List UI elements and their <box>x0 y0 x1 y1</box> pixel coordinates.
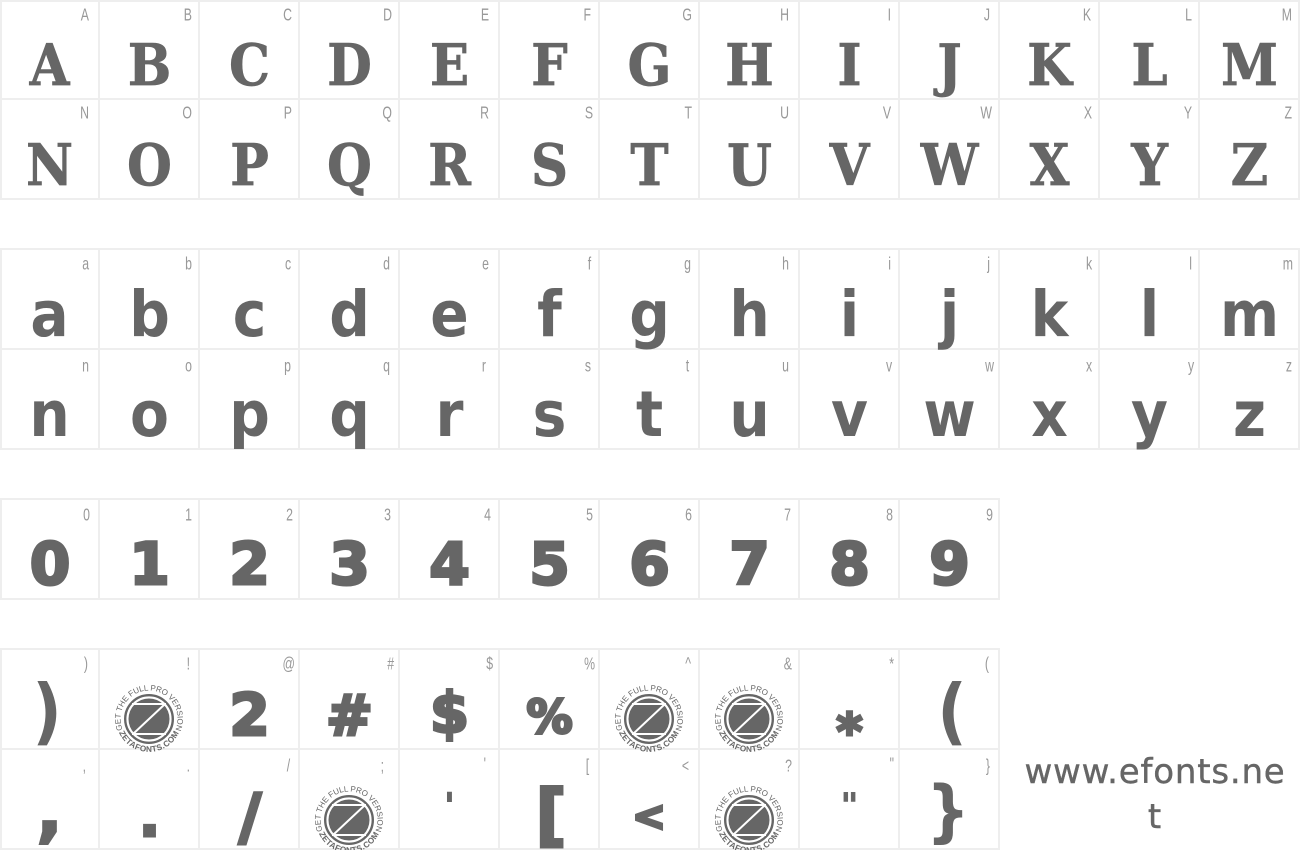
lowercase specimen n-z: x <box>1086 358 1093 376</box>
lowercase specimen a-m: k <box>1031 278 1070 351</box>
lowercase specimen n-z <box>29 358 1292 451</box>
uppercase specimen N-Z: P <box>230 132 269 199</box>
badge: ^ cell: ZETAFONTS.COM <box>619 730 679 752</box>
symbols row 2: . <box>139 785 160 850</box>
symbols row 2: [ <box>586 758 590 776</box>
uppercase specimen A-M: C <box>283 7 292 25</box>
digits specimen 0-9: 5 <box>529 530 570 598</box>
lowercase specimen a-m: e <box>430 278 469 351</box>
symbols row 2: ' <box>484 756 486 774</box>
symbols row 1: ) <box>32 669 62 753</box>
lowercase specimen a-m: f <box>537 278 563 351</box>
symbols row 1: # <box>387 656 395 674</box>
uppercase specimen A-M: G <box>628 32 671 99</box>
digits specimen 0-9: 7 <box>784 507 791 525</box>
uppercase specimen A-M: D <box>383 7 392 25</box>
badge: ? cell: GET THE FULL PRO VERSION <box>714 786 783 832</box>
digits specimen 0-9: 6 <box>629 530 670 598</box>
lowercase specimen a-m: h <box>729 278 770 351</box>
uppercase specimen A-M: H <box>780 7 789 25</box>
lowercase specimen n-z: z <box>1233 378 1266 451</box>
symbols row 2: < <box>682 758 689 776</box>
uppercase specimen A-M: E <box>481 7 489 25</box>
uppercase specimen N-Z: U <box>727 132 772 199</box>
lowercase specimen a-m: g <box>629 278 670 351</box>
lowercase specimen n-z: v <box>831 378 868 451</box>
symbols row 1: $ <box>486 656 494 674</box>
lowercase specimen n-z: t <box>636 378 663 451</box>
uppercase specimen A-M: C <box>229 32 270 99</box>
symbols row 2: . <box>187 758 190 776</box>
symbols row 1: ^ <box>685 656 691 674</box>
uppercase specimen N-Z: Y <box>1130 132 1169 199</box>
badge: & cell: GET THE FULL PRO VERSION <box>714 685 783 731</box>
digits specimen 0-9: 7 <box>729 530 770 598</box>
symbols row 2: < <box>632 794 666 840</box>
lowercase specimen n-z: v <box>886 358 893 376</box>
lowercase specimen n-z: u <box>782 358 789 376</box>
lowercase specimen a-m: b <box>185 256 192 274</box>
lowercase specimen n-z: t <box>686 358 690 376</box>
lowercase specimen n-z: w <box>984 358 994 376</box>
uppercase specimen N-Z: O <box>182 105 192 123</box>
lowercase specimen a-m: i <box>840 278 859 351</box>
digits specimen 0-9: 9 <box>929 530 970 598</box>
lowercase specimen a-m: j <box>986 256 990 274</box>
uppercase specimen N-Z: N <box>26 132 73 199</box>
symbols row 2: , <box>83 758 86 776</box>
uppercase specimen A-M <box>29 7 1292 99</box>
symbols row 1: @ <box>283 656 295 674</box>
uppercase specimen N-Z: P <box>284 105 292 123</box>
badge: ; cell <box>314 786 383 850</box>
grid lines: digits <box>1 499 999 599</box>
lowercase specimen n-z: q <box>383 358 390 376</box>
uppercase specimen N-Z: R <box>428 132 471 199</box>
symbols row 2: } <box>986 758 990 776</box>
symbols row 1: $ <box>430 681 469 746</box>
lowercase specimen a-m: c <box>285 256 292 274</box>
digits specimen 0-9: 2 <box>286 507 293 525</box>
uppercase specimen N-Z: S <box>585 105 593 123</box>
symbols row 1: ! <box>187 656 190 674</box>
uppercase specimen N-Z <box>26 105 1292 199</box>
uppercase specimen N-Z: W <box>920 132 980 199</box>
symbols row 1: % <box>526 690 573 744</box>
digits specimen 0-9 <box>30 507 993 598</box>
lowercase specimen a-m: i <box>888 256 891 274</box>
lowercase specimen a-m: m <box>1220 278 1279 351</box>
badge: ; cell: GET THE FULL PRO VERSION <box>314 786 383 832</box>
uppercase specimen A-M: B <box>128 32 171 99</box>
uppercase specimen A-M: J <box>933 32 962 99</box>
uppercase specimen A-M: L <box>1185 7 1192 25</box>
uppercase specimen N-Z: X <box>1084 105 1092 123</box>
digits specimen 0-9: 3 <box>329 530 370 598</box>
uppercase specimen N-Z: U <box>780 105 789 123</box>
site credit: www.efonts.ne <box>1024 752 1286 792</box>
symbols row 2: , <box>37 773 62 850</box>
symbols row 1: * <box>889 656 894 674</box>
symbols row 2: ? <box>785 758 792 776</box>
uppercase specimen A-M: G <box>682 7 692 25</box>
badge: ^ cell: GET THE FULL PRO VERSION <box>614 685 683 731</box>
lowercase specimen n-z: n <box>29 378 70 451</box>
lowercase specimen a-m: k <box>1086 256 1093 274</box>
lowercase specimen a-m: d <box>329 278 370 351</box>
lowercase specimen n-z: u <box>729 378 770 451</box>
uppercase specimen A-M: H <box>725 32 774 99</box>
lowercase specimen n-z: r <box>482 358 486 376</box>
digits specimen 0-9: 0 <box>83 507 90 525</box>
symbols row 1: & <box>784 656 792 674</box>
uppercase specimen A-M: K <box>1083 7 1091 25</box>
digits specimen 0-9: 1 <box>185 507 192 525</box>
lowercase specimen a-m: c <box>233 278 266 351</box>
lowercase specimen a-m: e <box>482 256 489 274</box>
uppercase specimen N-Z: X <box>1030 132 1070 199</box>
uppercase specimen A-M: M <box>1221 32 1278 99</box>
lowercase specimen a-m: j <box>938 278 959 351</box>
uppercase specimen N-Z: Q <box>382 105 392 123</box>
lowercase specimen n-z: y <box>1188 358 1195 376</box>
lowercase specimen a-m: a <box>82 256 90 274</box>
uppercase specimen N-Z: V <box>829 132 871 199</box>
symbols row 1: ) <box>84 656 88 674</box>
uppercase specimen A-M: M <box>1282 7 1292 25</box>
lowercase specimen a-m: a <box>30 278 69 351</box>
uppercase specimen A-M: F <box>531 32 568 99</box>
symbols row 2: ; <box>381 758 384 776</box>
lowercase specimen n-z: z <box>1286 358 1292 376</box>
lowercase specimen a-m: l <box>1189 256 1192 274</box>
digits specimen 0-9: 8 <box>886 507 893 525</box>
grid lines: lowercase <box>1 249 1299 449</box>
uppercase specimen A-M: L <box>1131 32 1168 99</box>
badge: ^ cell <box>614 685 683 752</box>
symbols row 2: " <box>841 786 858 826</box>
site credit <box>1024 752 1286 837</box>
uppercase specimen N-Z: Y <box>1184 105 1192 123</box>
lowercase specimen n-z: o <box>130 378 169 451</box>
uppercase specimen A-M: K <box>1027 32 1074 99</box>
symbols row 1: % <box>584 656 595 674</box>
badge: ! cell <box>114 685 183 752</box>
badge: ! cell: ZETAFONTS.COM <box>119 730 179 752</box>
lowercase specimen n-z: s <box>585 358 591 376</box>
uppercase specimen N-Z: Q <box>327 132 372 199</box>
lowercase specimen a-m: b <box>129 278 170 351</box>
digits specimen 0-9: 8 <box>829 530 870 598</box>
lowercase specimen n-z: n <box>82 358 89 376</box>
lowercase specimen a-m: d <box>383 256 390 274</box>
uppercase specimen A-M: F <box>583 7 591 25</box>
lowercase specimen a-m: m <box>1283 256 1293 274</box>
uppercase specimen N-Z: S <box>531 132 568 199</box>
uppercase specimen N-Z: O <box>127 132 172 199</box>
uppercase specimen N-Z: T <box>684 105 692 123</box>
symbols row 2: / <box>287 758 291 776</box>
uppercase specimen A-M: J <box>984 7 990 25</box>
symbols row 1: ( <box>937 669 967 753</box>
uppercase specimen N-Z: Z <box>1284 105 1292 123</box>
uppercase specimen A-M: I <box>838 32 862 99</box>
symbols row 1: ( <box>985 656 989 674</box>
badge: & cell: ZETAFONTS.COM <box>719 730 779 752</box>
uppercase specimen N-Z: Z <box>1231 132 1268 199</box>
uppercase specimen A-M: D <box>327 32 372 99</box>
uppercase specimen N-Z: R <box>480 105 489 123</box>
digits specimen 0-9: 3 <box>384 507 391 525</box>
symbols row 1 <box>32 656 989 761</box>
grid lines: uppercase <box>1 1 1299 199</box>
symbols row 2 <box>37 756 990 850</box>
site credit: t <box>1148 797 1162 837</box>
symbols row 2: ' <box>444 786 455 826</box>
lowercase specimen n-z: q <box>329 378 370 451</box>
uppercase specimen N-Z: V <box>883 105 891 123</box>
lowercase specimen a-m: g <box>684 256 691 274</box>
symbols row 1: 2 <box>229 681 270 749</box>
uppercase specimen N-Z: N <box>80 105 89 123</box>
lowercase specimen n-z: r <box>436 378 464 451</box>
uppercase specimen A-M: A <box>81 7 89 25</box>
symbols row 1: * <box>836 703 863 761</box>
badge: ! cell: GET THE FULL PRO VERSION <box>114 685 183 731</box>
digits specimen 0-9: 4 <box>429 530 470 598</box>
grid lines: symbols <box>1 649 999 849</box>
lowercase specimen n-z: o <box>185 358 192 376</box>
symbols row 2: " <box>890 756 894 774</box>
lowercase specimen n-z: x <box>1031 378 1068 451</box>
lowercase specimen n-z: y <box>1131 378 1168 451</box>
badge: ? cell <box>714 786 783 850</box>
symbols row 1: # <box>326 684 373 749</box>
lowercase specimen n-z: s <box>533 378 566 451</box>
symbols row 2: } <box>926 772 970 850</box>
lowercase specimen a-m <box>30 256 1293 351</box>
uppercase specimen N-Z: T <box>630 132 669 199</box>
digits specimen 0-9: 4 <box>484 507 491 525</box>
uppercase specimen A-M: E <box>430 32 469 99</box>
digits specimen 0-9: 6 <box>685 507 692 525</box>
uppercase specimen A-M: A <box>29 32 71 99</box>
lowercase specimen a-m: h <box>782 256 789 274</box>
digits specimen 0-9: 9 <box>986 507 993 525</box>
uppercase specimen A-M: I <box>888 7 891 25</box>
lowercase specimen n-z: p <box>229 378 270 451</box>
lowercase specimen n-z: p <box>284 358 291 376</box>
uppercase specimen A-M: B <box>184 7 192 25</box>
uppercase specimen N-Z: W <box>980 105 992 123</box>
digits specimen 0-9: 5 <box>586 507 593 525</box>
digits specimen 0-9: 1 <box>129 530 170 598</box>
badge: & cell <box>714 685 783 752</box>
lowercase specimen n-z: w <box>923 378 976 451</box>
digits specimen 0-9: 0 <box>30 530 70 598</box>
lowercase specimen a-m: f <box>588 256 592 274</box>
digits specimen 0-9: 2 <box>229 530 270 598</box>
lowercase specimen a-m: l <box>1140 278 1159 351</box>
